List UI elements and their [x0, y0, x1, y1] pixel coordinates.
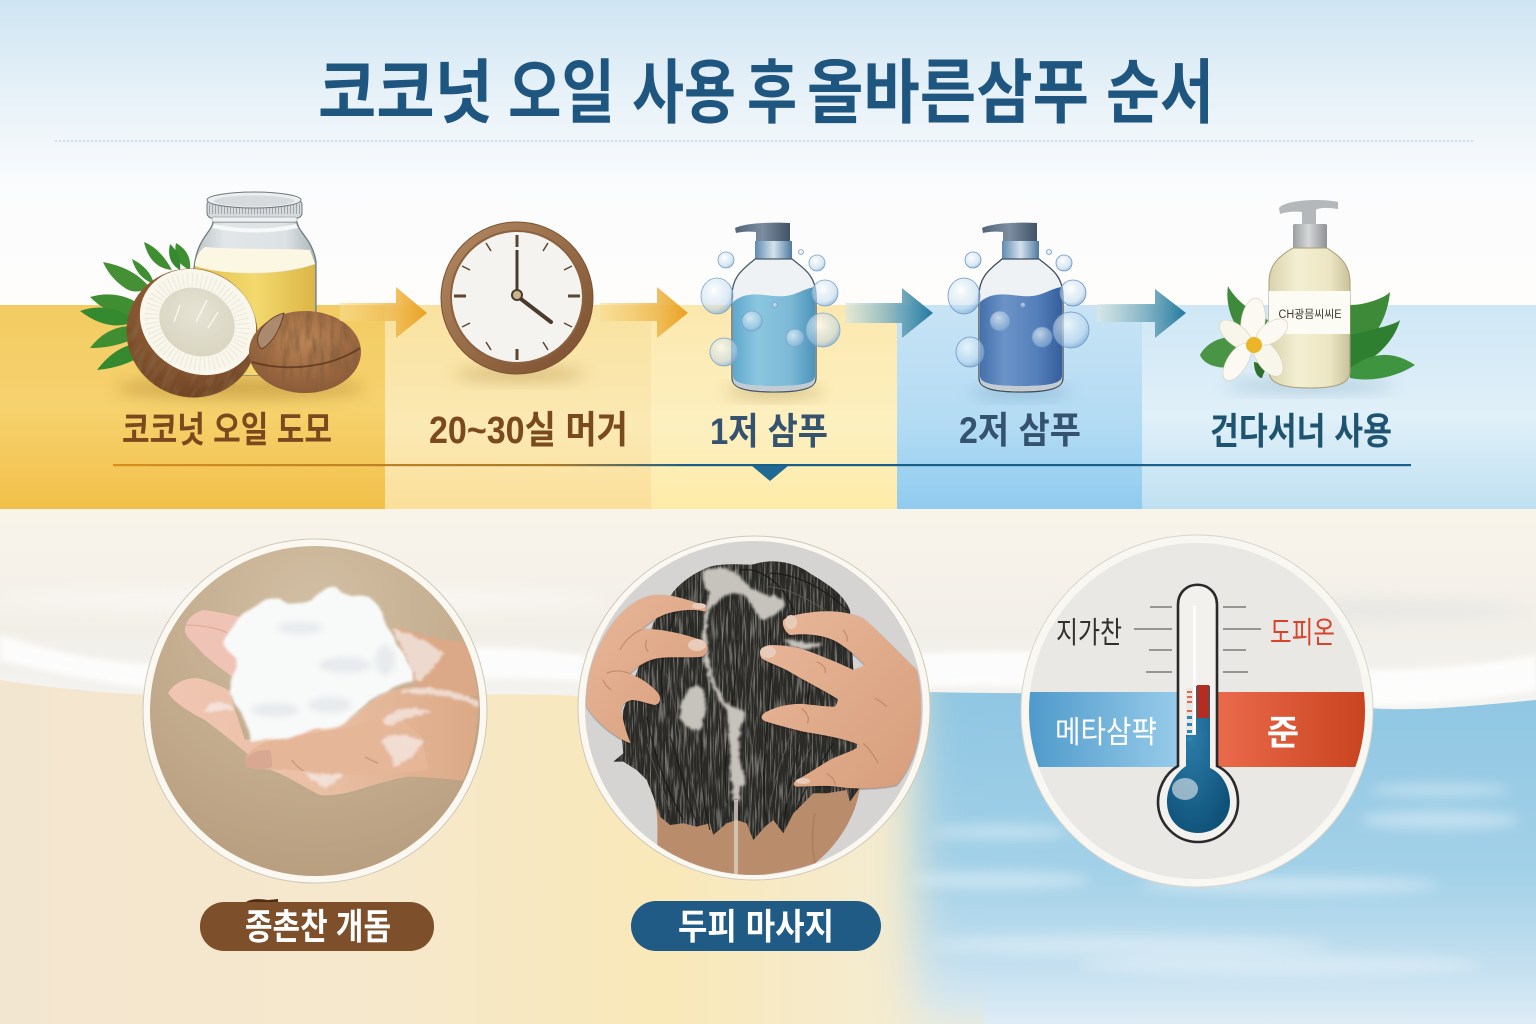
bottle label: CH광믐씨씨E — [1278, 308, 1342, 321]
icon: whole coconut — [249, 311, 361, 393]
caption pill: lather: 종촌찬 개돔 — [245, 906, 391, 947]
title: 후 — [747, 54, 797, 132]
arrow 3 — [845, 288, 933, 338]
title — [318, 54, 1214, 132]
flower — [1214, 297, 1292, 385]
right hand — [760, 611, 921, 788]
title: 코코넛 — [318, 54, 493, 132]
title: 사용 — [632, 54, 736, 132]
step 1: coconut oil — [80, 192, 365, 421]
soap bubbles — [948, 250, 1089, 367]
panel: temperature gauge — [1021, 535, 1373, 887]
step 3 label: 1저 삼푸 — [710, 411, 828, 452]
title: 오일 — [508, 54, 615, 132]
neck and shoulders — [655, 787, 860, 877]
pump — [1279, 200, 1338, 250]
foam — [225, 586, 413, 740]
leaves — [1200, 286, 1415, 379]
label: low temp: 지가찬 — [1056, 617, 1122, 650]
step 5: conditioner bottle — [1200, 200, 1415, 391]
arrow 4 — [1097, 289, 1186, 338]
step 4: second shampoo bottle — [948, 223, 1089, 397]
step 4 label: 2저 삼푸 — [959, 410, 1081, 451]
thermometer — [1158, 585, 1238, 842]
panel: scalp massage — [578, 536, 930, 882]
label: warm band: 준 — [1267, 714, 1299, 753]
icon: oil jar — [194, 192, 316, 375]
panel: foam in hands — [143, 539, 487, 883]
step 5 label: 건다서너 사용 — [1210, 411, 1392, 452]
caption pill: lather — [200, 899, 434, 951]
bottle pump — [982, 223, 1039, 260]
label: high temp: 도피온 — [1270, 617, 1335, 650]
caption pill: scalp massage: 두피 마사지 — [678, 906, 834, 947]
step 3: first shampoo bottle — [701, 223, 840, 397]
bottle pump — [735, 223, 792, 260]
band: cool water — [1029, 692, 1177, 767]
shampoo streak — [680, 568, 823, 876]
back hand fingers — [185, 610, 240, 677]
step 2: clock icon — [441, 222, 593, 380]
soap bubbles — [701, 250, 840, 366]
hair — [613, 561, 859, 840]
timeline line with marker — [113, 464, 1411, 481]
left hand — [587, 595, 708, 743]
color bands behind process steps — [0, 305, 1536, 509]
icon: palm leaves — [80, 242, 190, 370]
caption pill: scalp massage — [631, 901, 881, 951]
icon: coconut half — [103, 245, 281, 421]
thumb — [245, 729, 428, 774]
title: 올바른삼푸 — [807, 54, 1089, 132]
arrow 2 — [600, 287, 688, 338]
back hand wrist — [392, 625, 478, 697]
tick lines — [1134, 607, 1261, 672]
bottle label — [1269, 291, 1350, 334]
front hand — [168, 678, 478, 795]
foam on skin — [205, 628, 478, 788]
label: cool band: 메타삼퍅 — [1055, 715, 1157, 750]
title: 순서 — [1106, 54, 1214, 132]
band: warm water — [1217, 692, 1365, 767]
step 1 label: 코코넛 오일 도모 — [122, 409, 332, 450]
step 2 label: 20~30실 머거 — [429, 410, 628, 452]
arrow 1 — [340, 287, 427, 338]
